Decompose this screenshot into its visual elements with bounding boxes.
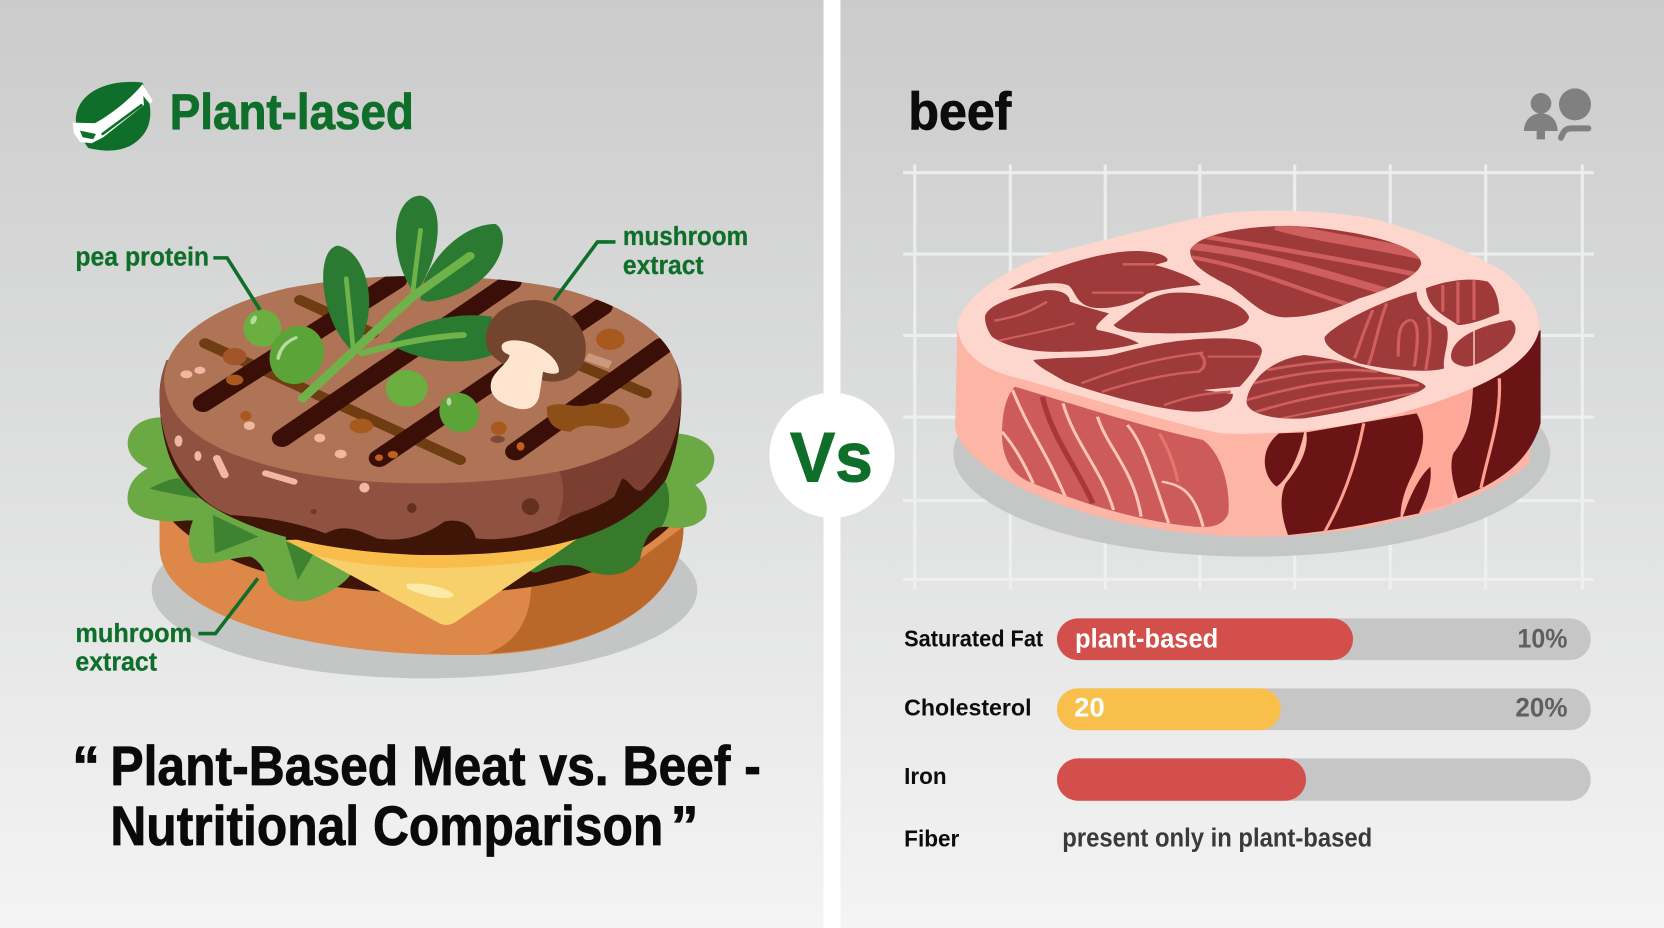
- callout: mushroom extract: mushroom: [623, 223, 748, 251]
- nutrition comparison bars: [904, 618, 1591, 853]
- row: fiber: [904, 825, 1372, 853]
- title: Plant-Based Meat vs. Beef -: [110, 735, 761, 797]
- grill marks: [203, 280, 662, 460]
- heading: plant-lased: Plant-lased: [170, 84, 414, 140]
- logo: plant-based leaf: [73, 82, 153, 151]
- muscle regions: [985, 226, 1516, 419]
- bar: iron: Iron: [904, 763, 947, 789]
- row: fiber: Fiber: [904, 826, 959, 852]
- title: Nutritional Comparison: [110, 795, 663, 857]
- bar: saturated fat: Saturated Fat: [904, 626, 1043, 652]
- bar: saturated fat: [904, 618, 1591, 660]
- bar: cholesterol: Cholesterol: [904, 695, 1032, 721]
- bar: saturated fat: plant-based: [1075, 624, 1218, 654]
- heading: beef: beef: [908, 82, 1012, 141]
- bun: [160, 520, 683, 655]
- divider with vs badge: [769, 393, 895, 518]
- bar: iron: [904, 758, 1591, 801]
- title: ”: [671, 795, 699, 857]
- illustration: beef steak: [953, 211, 1550, 557]
- callout: mushroom extract: [554, 223, 748, 300]
- bar: cholesterol: [904, 688, 1591, 730]
- side muscle: [1002, 387, 1229, 527]
- callout: muhroom extract: [75, 578, 258, 677]
- callout: pea protein: pea protein: [75, 243, 209, 271]
- callout: muhroom extract: extract: [75, 649, 158, 677]
- steak side: [955, 327, 1541, 537]
- panel: plant-based: [0, 0, 824, 928]
- bar: cholesterol: 20%: [1515, 693, 1567, 723]
- steak top: [957, 211, 1539, 434]
- panel: beef: [840, 0, 1664, 928]
- fat seams: [1008, 285, 1077, 302]
- cheese: [286, 535, 583, 625]
- callout: mushroom extract: extract: [623, 252, 704, 280]
- divider with vs badge: Vs: [790, 419, 873, 497]
- mushroom: [486, 300, 586, 409]
- icon: people: [1524, 88, 1591, 139]
- callout: muhroom extract: muhroom: [75, 620, 192, 648]
- bar: saturated fat: 10%: [1518, 623, 1567, 653]
- patty: [160, 276, 682, 555]
- herb sprig: [303, 196, 503, 398]
- bar: cholesterol: 20: [1074, 693, 1105, 723]
- grid background: [903, 164, 1594, 589]
- marbling lines: [994, 225, 1474, 418]
- lettuce: [128, 413, 714, 601]
- callout: pea protein: [75, 243, 260, 310]
- title: [72, 735, 761, 857]
- specks: [181, 329, 630, 461]
- row: fiber: present only in plant-based: [1062, 825, 1372, 853]
- title: “: [72, 735, 100, 797]
- illustration: burger: [128, 196, 714, 678]
- peas: [243, 310, 484, 436]
